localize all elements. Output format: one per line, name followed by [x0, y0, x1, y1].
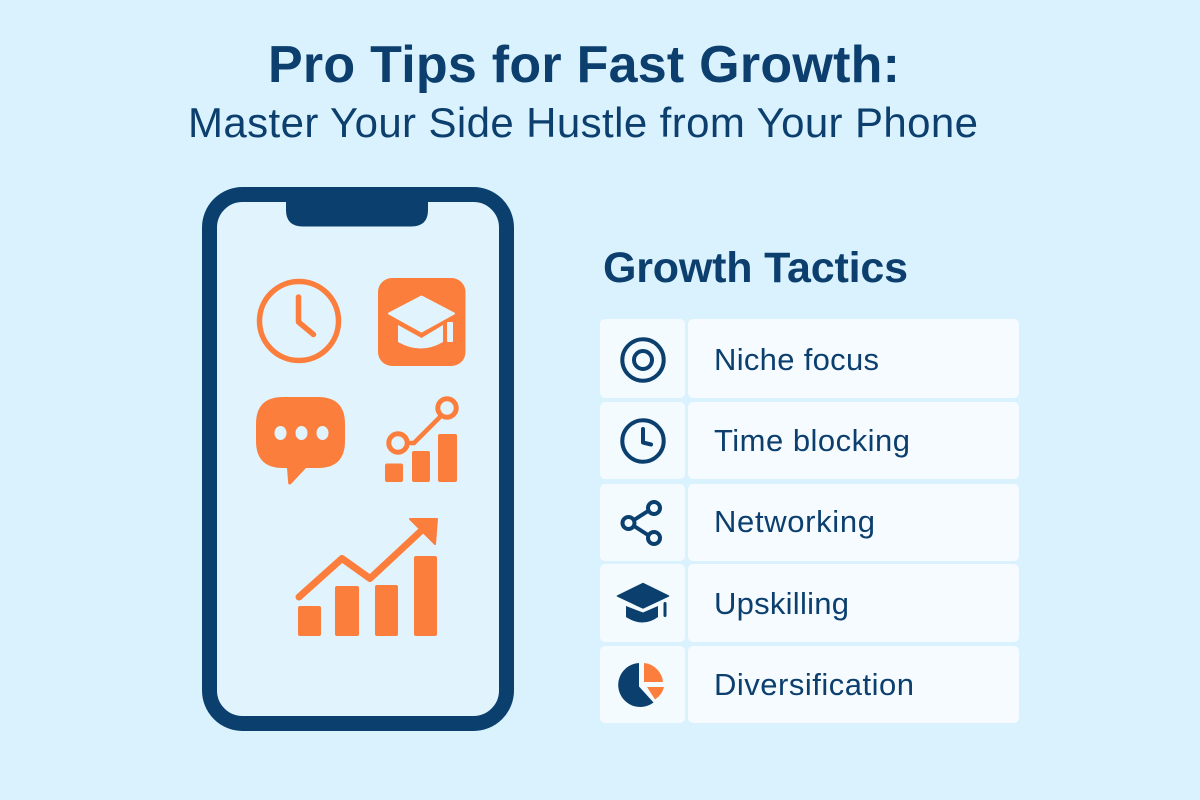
- heading: growth tactics: Growth Tactics: [603, 244, 908, 292]
- icon: target: [622, 339, 664, 381]
- row: diversification: [600, 646, 1019, 723]
- title: Pro Tips for Fast Growth:: [268, 36, 900, 94]
- icon: small growth chart: [385, 399, 457, 482]
- phone notch: [286, 200, 428, 226]
- icon: speech bubble: [256, 397, 345, 485]
- icon: pie chart: [618, 663, 664, 707]
- phone body: [210, 194, 506, 724]
- phone illustration: [210, 194, 506, 724]
- label: Diversification: [714, 667, 914, 702]
- label: Time blocking: [714, 423, 910, 458]
- icon: clock: [622, 420, 664, 462]
- icon: graduation cap: [618, 584, 668, 622]
- row: time blocking: [600, 402, 1019, 479]
- icon: graduation cap tile: [378, 278, 466, 366]
- row: upskilling: [600, 564, 1019, 642]
- label: Networking: [714, 504, 875, 539]
- icon: clock: [260, 282, 338, 360]
- label: Upskilling: [714, 586, 849, 621]
- icon: share nodes: [622, 502, 660, 544]
- row: niche focus: [600, 319, 1019, 398]
- label: Niche focus: [714, 342, 879, 377]
- row: networking: [600, 484, 1019, 561]
- subtitle: Master Your Side Hustle from Your Phone: [188, 99, 978, 146]
- icon: large growth chart with arrow: [298, 519, 437, 636]
